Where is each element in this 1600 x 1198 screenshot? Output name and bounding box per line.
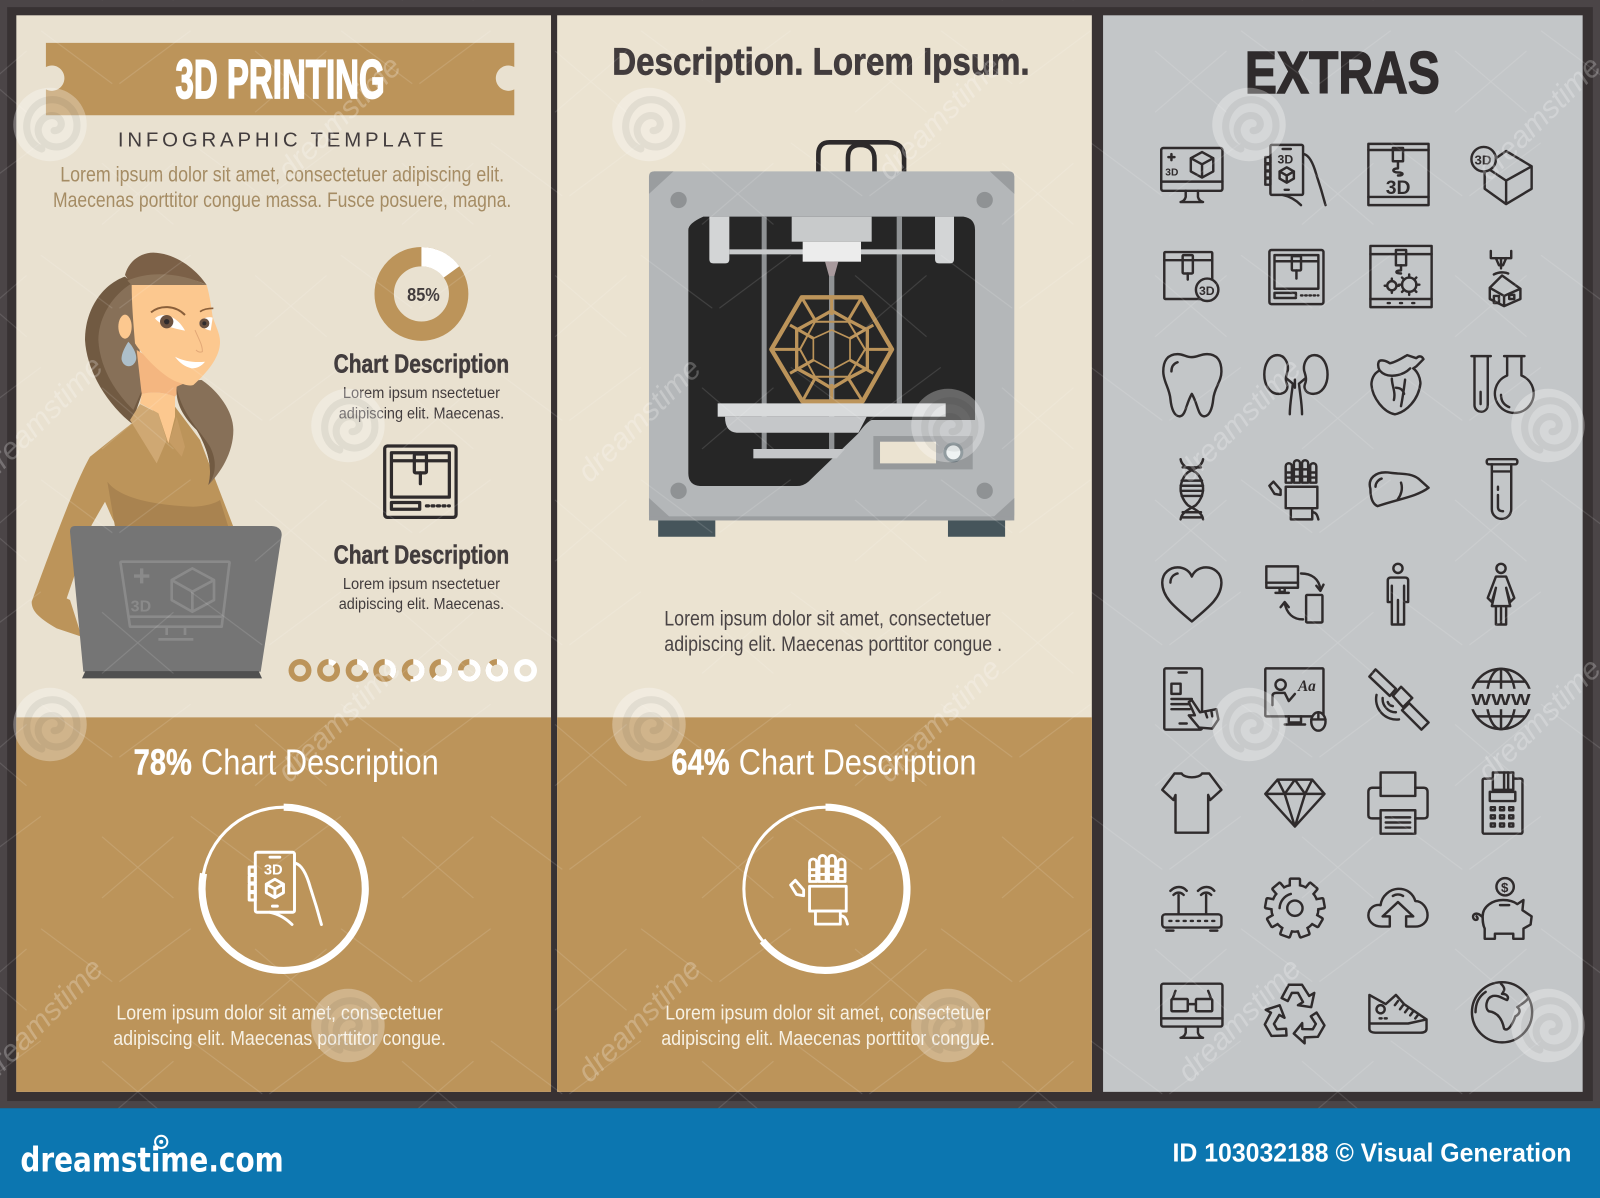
text: dreamstime (871, 652, 1008, 789)
panel: middle description (557, 15, 1092, 1092)
icon: devices sync (1266, 566, 1323, 622)
progress donuts row (291, 662, 534, 679)
text: dreamstime (571, 352, 708, 489)
icon: robotic hand (791, 855, 847, 924)
icon: printer gears (1370, 246, 1432, 307)
text: dreamstime (571, 952, 708, 1089)
text block: chart description 2: Lorem ipsum nsectetuer (343, 576, 500, 593)
heading: 64% chart description (671, 743, 977, 783)
icon: nozzle printing house (1490, 251, 1520, 306)
icon: 3D box (1471, 147, 1532, 204)
icon: tooth (1163, 354, 1221, 416)
text block: chart description 2: adipiscing elit. Maecenas. (339, 596, 504, 613)
heading: 78% chart description (134, 743, 439, 783)
text block: middle (664, 608, 1002, 656)
intro text: Lorem ipsum dolor sit amet, consectetuer adipiscing elit. (60, 164, 504, 187)
icon: satellite (1369, 669, 1429, 730)
footer bar (0, 1108, 1600, 1198)
icon: piggy bank: $ (1501, 880, 1509, 895)
text: dreamstime (271, 49, 408, 187)
icon: liver (1370, 472, 1429, 506)
chart: 64% ring with robotic hand icon (744, 807, 907, 970)
text block: chart description 2 (334, 541, 509, 613)
panel: extras icons (1103, 15, 1583, 1092)
subtitle: INFOGRAPHIC TEMPLATE (118, 129, 443, 151)
icon: recycle (1259, 985, 1328, 1047)
text: dreamstime (1171, 352, 1308, 489)
text: dreamstime (871, 49, 1008, 187)
icon: www globe (1469, 669, 1533, 729)
text block: chart description 1: adipiscing elit. Maecenas. (339, 405, 504, 422)
icon: printer 3D: 3D (1386, 177, 1410, 199)
3D printed gem (771, 297, 892, 401)
text: dreamstime (271, 652, 408, 789)
text block: chart description 1: Chart Description (334, 350, 509, 378)
text block: chart description 1: Lorem ipsum nsectetuer (343, 385, 500, 402)
illustration: 3D printer (649, 142, 1014, 537)
icon: printer badge (1164, 252, 1218, 301)
icon: online lesson: Aa (1297, 678, 1316, 695)
heading: 64% chart description: 64% (671, 743, 730, 783)
panel: left infographic (16, 15, 551, 1092)
icon: test tube and flask (1471, 356, 1534, 413)
icon: man (1388, 564, 1408, 625)
intro text: Maecenas porttitor congue massa. Fusce posuere, magna. (53, 189, 511, 212)
icon: laptop monitor 3D (120, 562, 230, 639)
footer logo: dreamstime.com (20, 1140, 284, 1179)
icon: cloud upload (1368, 889, 1428, 927)
icon: phone with hand (1164, 668, 1218, 730)
icon: printer badge: 3D (1199, 284, 1215, 298)
title banner (46, 43, 514, 115)
icon: 3D printer (385, 446, 456, 517)
icon: globe (1472, 982, 1532, 1042)
text block: middle lower: adipiscing elit. Maecenas porttitor congue. (661, 1028, 995, 1050)
text block: left lower: adipiscing elit. Maecenas porttitor congue. (113, 1028, 446, 1050)
heading: description: Description. Lorem Ipsum. (612, 40, 1030, 82)
icon: piggy bank (1473, 878, 1532, 939)
icon: monitor with glasses (1161, 984, 1222, 1038)
icon: test tube (1487, 459, 1517, 519)
icon: monitor 3D (1161, 148, 1222, 202)
icon: phone in hand: 3D (264, 862, 283, 878)
icon: router (1162, 887, 1221, 931)
icon: printer 3D (1368, 144, 1429, 205)
icon: www globe: WWW (1471, 692, 1531, 709)
icon: woman (1488, 564, 1514, 625)
footer credit: ID 103032188 © Visual Generation (1172, 1139, 1571, 1167)
icon: online lesson (1265, 668, 1326, 731)
icon: heart organ (1371, 355, 1423, 414)
heading: 78% chart description: 78% (134, 743, 192, 783)
icon: kidneys (1264, 355, 1328, 414)
text block: left lower (113, 1002, 446, 1050)
icon: card terminal (1483, 772, 1522, 834)
icon: phone in hand (1265, 145, 1326, 205)
icon: diamond (1265, 780, 1324, 827)
text block: middle: adipiscing elit. Maecenas porttitor congue . (664, 633, 1002, 656)
text block: chart description 1 (334, 350, 509, 422)
icon: sneaker (1369, 995, 1427, 1033)
title: 3D PRINTING (176, 48, 385, 110)
icon: dna (1181, 459, 1203, 519)
text: dreamstime (1171, 952, 1308, 1089)
icon: printer (1368, 772, 1428, 834)
text block: left lower: Lorem ipsum dolor sit amet, consectetuer (116, 1002, 443, 1024)
text block: middle: Lorem ipsum dolor sit amet, consectetuer (664, 608, 991, 631)
text block: middle lower (661, 1002, 995, 1050)
heading: 78% chart description: Chart Description (201, 743, 439, 783)
icon: gear (1265, 879, 1325, 938)
icon: robotic hand (1269, 460, 1318, 519)
chart: 78% ring with phone icon (202, 807, 365, 970)
illustration: woman with laptop (32, 253, 282, 678)
text block: chart description 2: Chart Description (334, 541, 509, 569)
icon: heart (1162, 567, 1221, 621)
heading: extras: EXTRAS (1245, 39, 1440, 106)
chart: 85% donut: 85% (407, 284, 440, 305)
icon: monitor 3D: 3D (1165, 168, 1178, 179)
icon: phone in hand (249, 852, 321, 925)
heading: 64% chart description: Chart Description (739, 743, 977, 783)
intro text (53, 164, 511, 212)
text block: middle lower: Lorem ipsum dolor sit amet, consectetuer (665, 1002, 991, 1024)
laptop (70, 526, 282, 678)
icon: phone in hand: 3D (1278, 152, 1293, 166)
icon: t-shirt (1162, 773, 1221, 833)
chart: 85% donut (384, 257, 459, 331)
icon: tablet printer (1269, 250, 1323, 304)
icon: 3D box: 3D (1474, 152, 1492, 167)
icon: laptop monitor 3D: 3D (131, 599, 151, 616)
